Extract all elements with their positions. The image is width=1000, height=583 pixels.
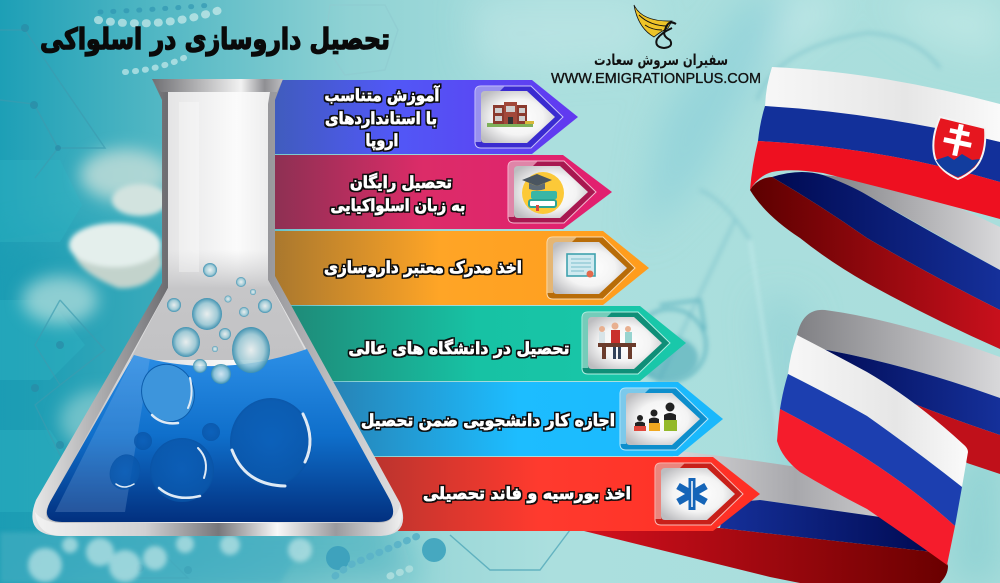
logo website address: WWW.EMIGRATIONPLUS.COM: [551, 71, 761, 87]
flask glass interior: [46, 92, 393, 523]
label: آموزش متناسب: [324, 84, 440, 106]
arrow 3: accredited degree: [268, 231, 649, 305]
label: تحصیل رایگان: [350, 172, 452, 192]
icon: gold wing and swan mark: [634, 5, 676, 48]
flag ribbon: lower ribbon back: [797, 310, 1000, 474]
label: اخذ مدرک معتبر داروسازی: [324, 258, 522, 278]
flask silver frame: [32, 79, 403, 536]
bubbles: [105, 263, 312, 502]
flag ribbon: lower ribbon front: [777, 335, 968, 565]
logo Persian name: سفیران سروش سعادت: [594, 51, 728, 69]
icon tile: students at a table: [582, 312, 670, 374]
title: تحصیل داروسازی در اسلواکی: [40, 22, 390, 56]
arrow 4: top universities: [268, 306, 686, 381]
icon tile: three people on podiums: [620, 388, 708, 450]
arrow 2: free tuition: [268, 155, 612, 229]
label: [324, 84, 440, 151]
flag ribbon: upper ribbon with coat of arms: [750, 67, 1000, 349]
icon tile: star of life: [655, 463, 743, 525]
logo: [551, 5, 761, 87]
flask illustration: [32, 79, 403, 536]
label: اجازه کار دانشجویی ضمن تحصیل: [361, 411, 615, 431]
flask top rim: [152, 79, 283, 92]
arrow 5: student work permit: [268, 382, 723, 456]
arrow 6: scholarship: [268, 457, 760, 531]
flag ribbon: lower tail behind last arrow: [580, 450, 948, 583]
flask bottom rim: [35, 505, 402, 536]
flask blue liquid: [47, 349, 393, 522]
panel: benefit arrows: [268, 80, 760, 531]
flask shoulder shading: [130, 250, 310, 360]
label: تحصیل در دانشگاه های عالی: [348, 338, 570, 358]
liquid light reflection: [55, 355, 150, 512]
icon tile: graduation cap and books: [508, 161, 596, 223]
label: به زبان اسلواکیایی: [330, 196, 466, 216]
icon: Slovak coat of arms: [933, 117, 985, 179]
label: اروپا: [366, 131, 398, 151]
label: [330, 172, 466, 216]
flask neck highlight: [179, 102, 199, 272]
icon tile: school building: [475, 86, 563, 148]
label: اخذ بورسیه و فاند تحصیلی: [423, 484, 631, 504]
label: با استانداردهای: [325, 109, 437, 128]
arrow 1: education standards: [268, 80, 578, 154]
icon tile: certificate: [547, 237, 635, 299]
